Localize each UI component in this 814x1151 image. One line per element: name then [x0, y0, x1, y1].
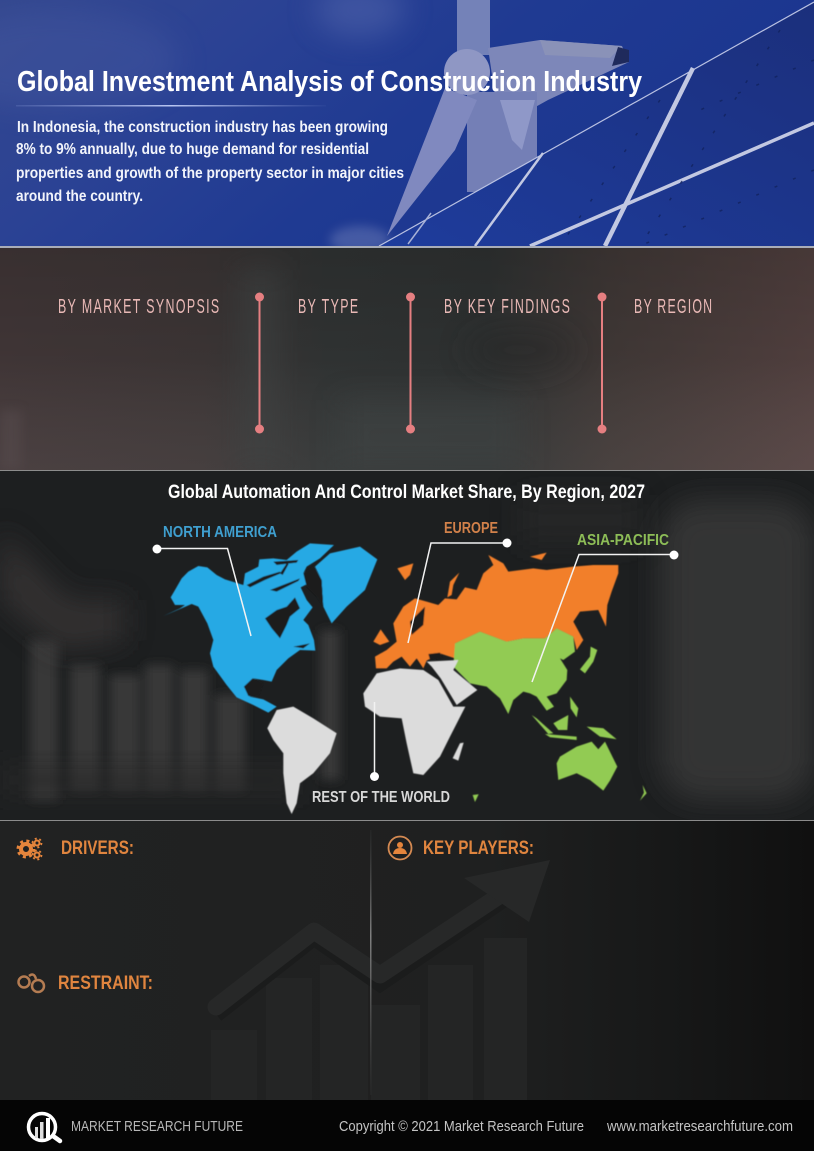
divider [370, 830, 372, 1095]
copyright: Copyright © 2021 Market Research Future [339, 1118, 584, 1135]
icon: key players target [388, 836, 412, 860]
illustration: wind turbine [387, 0, 629, 236]
website: www.marketresearchfuture.com [606, 1118, 793, 1135]
text block: intro: around the country. [16, 188, 143, 205]
callout: europe: EUROPE [444, 520, 498, 537]
callout: rest of the world: REST OF THE WORLD [312, 789, 450, 806]
map region: rest of the world [267, 660, 477, 814]
map region: asia-pacific [453, 628, 647, 802]
text block: intro: properties and growth of the property sector in major cities [16, 165, 404, 182]
heading: by type: BY TYPE [298, 295, 358, 318]
heading: drivers: DRIVERS: [61, 838, 134, 859]
callout: rest of the world [312, 702, 450, 806]
heading: by market synopsis: BY MARKET SYNOPSIS [58, 295, 219, 318]
logo: magnifier with bars [28, 1114, 60, 1141]
map region: north america [163, 543, 377, 713]
callout: europe [408, 520, 512, 643]
text block: intro: 8% to 9% annually, due to huge demand for residential [16, 141, 369, 158]
callout: asia-pacific [532, 532, 678, 682]
footer [0, 1100, 814, 1151]
title: Global Investment Analysis of Construction Industry [17, 66, 642, 98]
icon: handcuffs [18, 975, 44, 992]
brand name: MARKET RESEARCH FUTURE [71, 1118, 243, 1135]
heading: key players: KEY PLAYERS: [423, 838, 534, 859]
text block: intro: In Indonesia, the construction industry has been growing [17, 119, 388, 136]
world map [163, 543, 647, 814]
icon: gears [18, 838, 42, 860]
callout: north america: NORTH AMERICA [163, 524, 277, 541]
heading: by region: BY REGION [634, 295, 712, 318]
panel: regional map [0, 471, 814, 820]
panel: header banner [0, 0, 814, 254]
divider with end dots [406, 292, 415, 434]
map region: europe and russia [373, 553, 618, 668]
callout: asia-pacific: ASIA-PACIFIC [577, 532, 669, 549]
panel: report sections [0, 248, 814, 470]
text block: intro [16, 119, 404, 205]
heading: by key findings: BY KEY FINDINGS [444, 295, 570, 318]
background chart: rising arrow and bars [211, 860, 550, 1100]
callout: north america [152, 524, 277, 636]
panel: drivers, restraint and key players [0, 821, 814, 1100]
chart title: Global Automation And Control Market Share, By Region, 2027 [168, 482, 645, 503]
divider with end dots [255, 292, 264, 434]
illustration: solar panels [379, 2, 814, 246]
divider with end dots [598, 292, 606, 434]
heading: restraint: RESTRAINT: [58, 973, 153, 994]
